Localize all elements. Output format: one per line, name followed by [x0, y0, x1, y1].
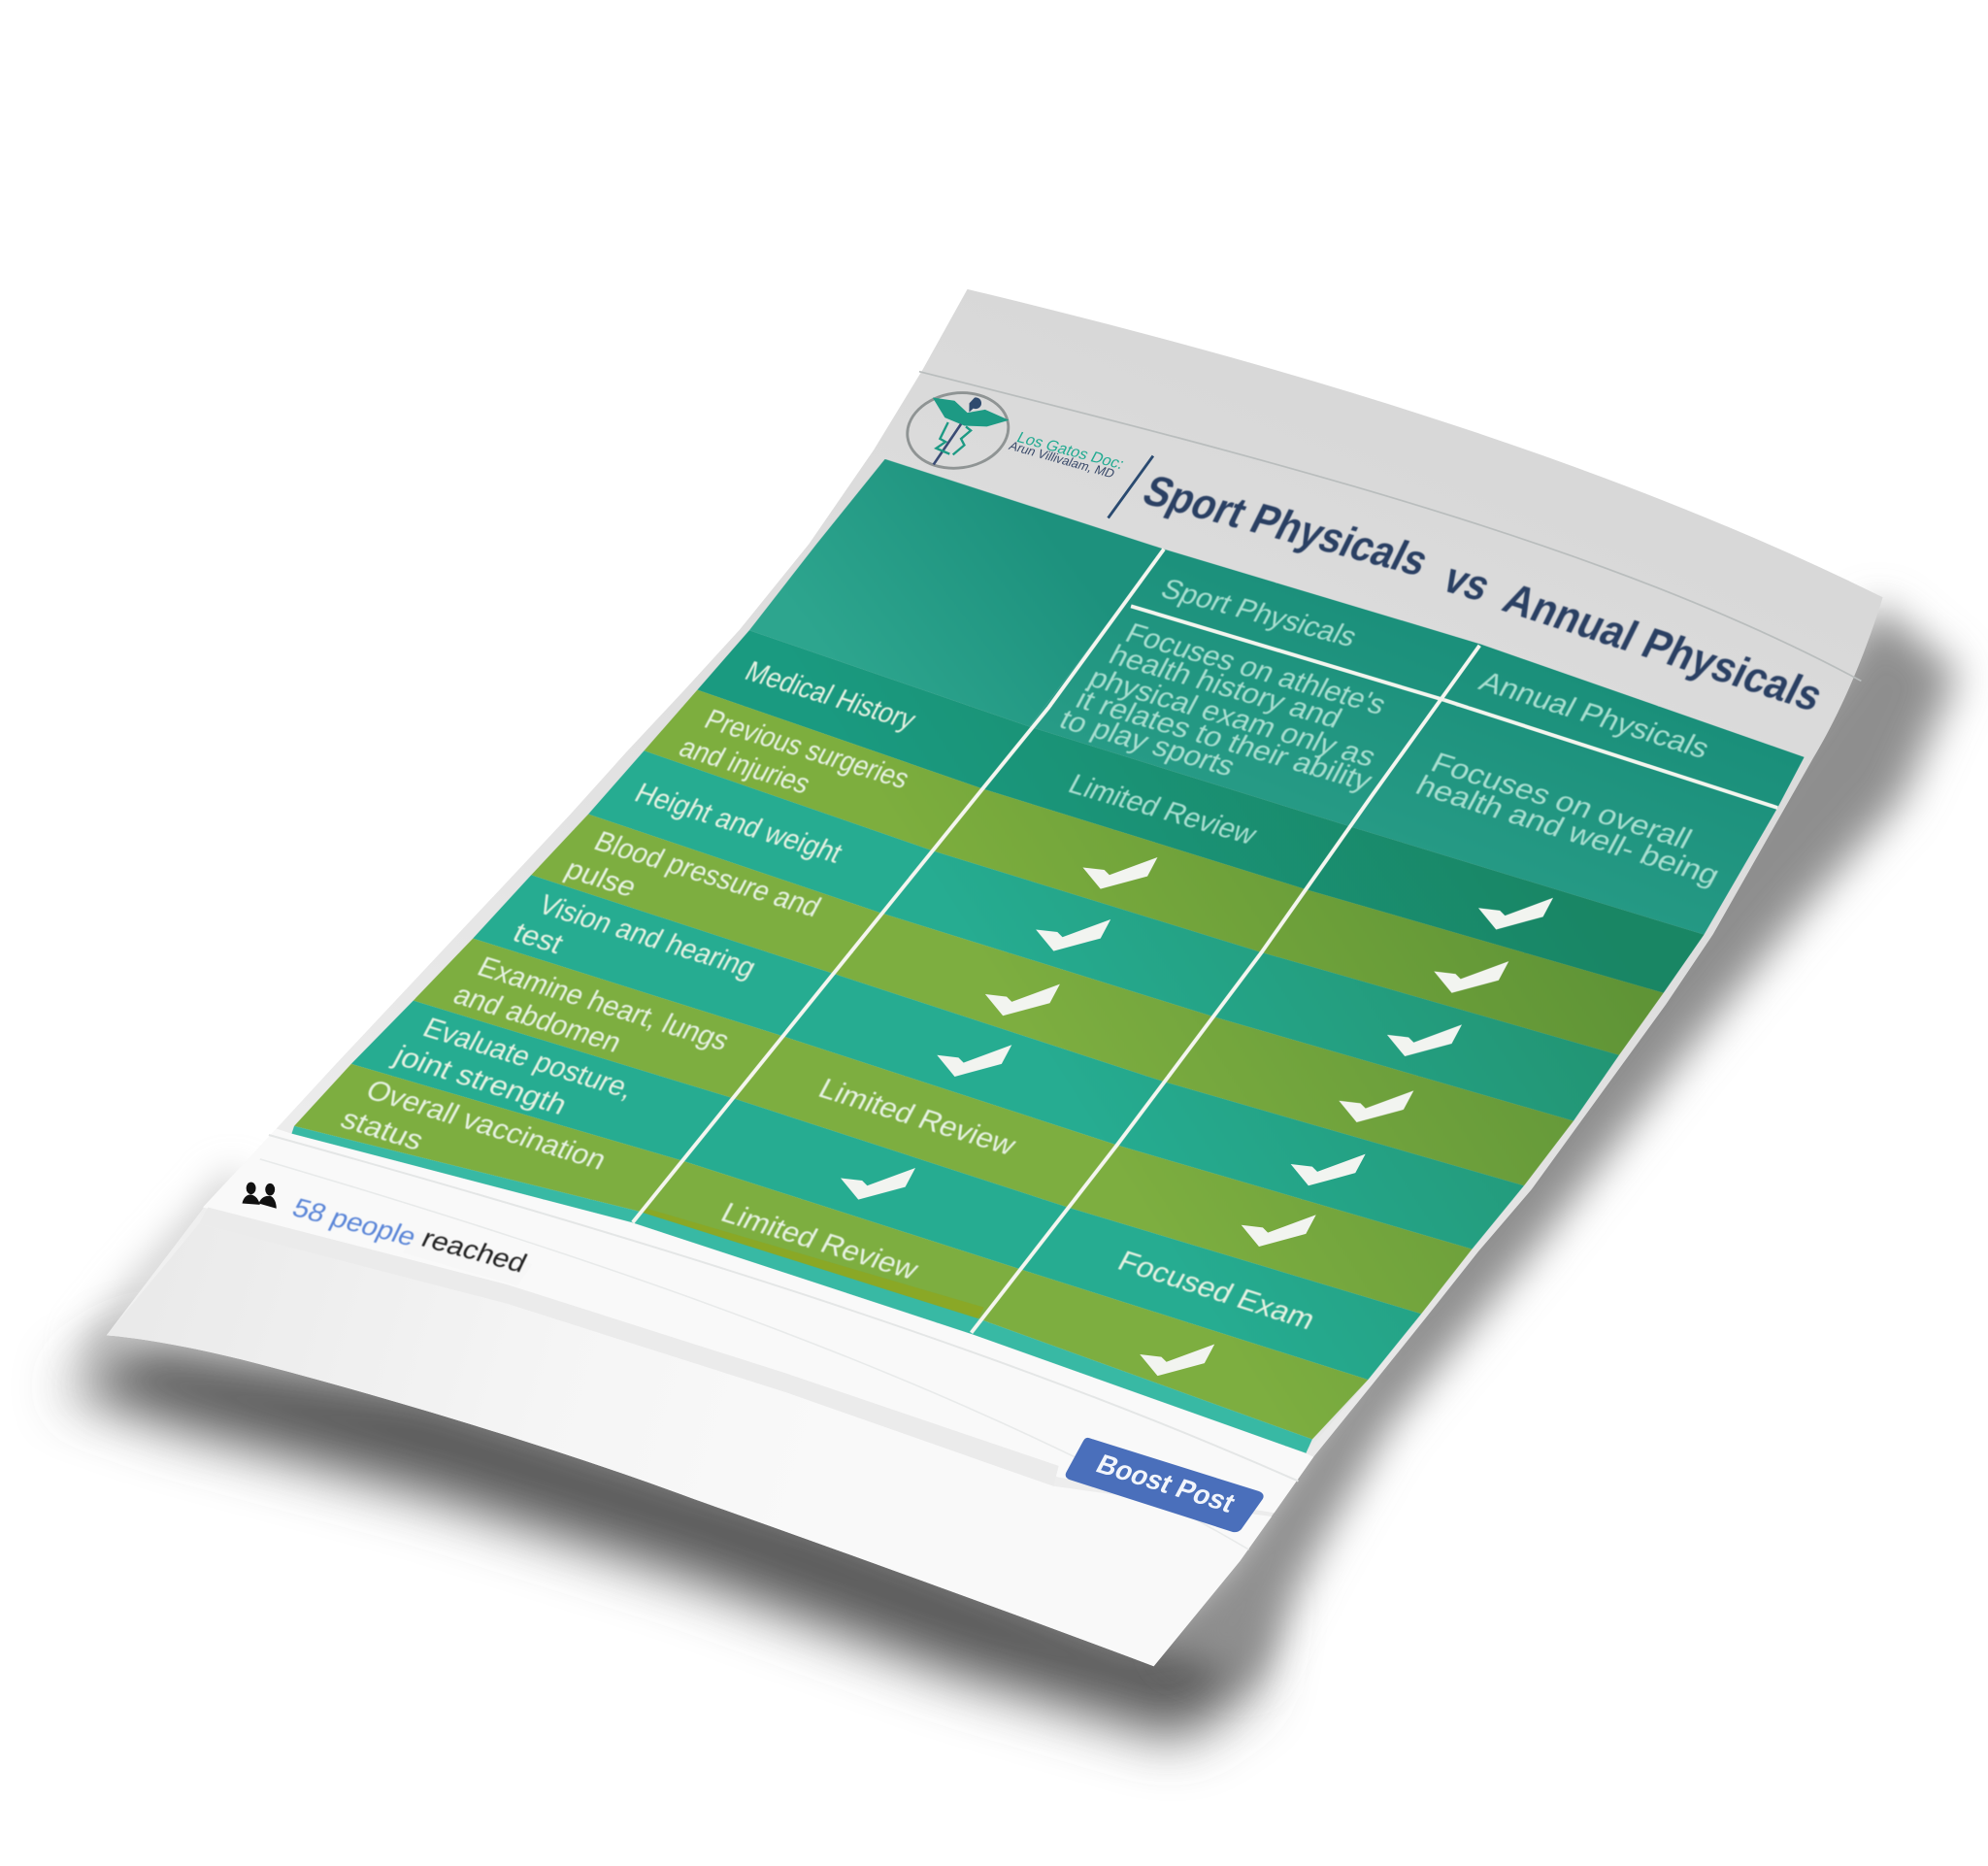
annual physicals column head: Annual Physicals — [1474, 665, 1715, 764]
row: examine — [414, 939, 1472, 1314]
focused exam: Focused Exam — [1112, 1245, 1321, 1336]
sport description: health history and — [1104, 639, 1347, 734]
logo wings — [933, 397, 1009, 426]
sport physicals column head: Sport Physicals — [1156, 573, 1363, 652]
examine heart: and abdomen — [448, 978, 627, 1058]
limited review row 6: Limited Review — [813, 1072, 1022, 1161]
medical history: Medical History — [740, 654, 922, 736]
overall vaccination: status — [336, 1102, 430, 1156]
row: vision and hearing — [473, 875, 1524, 1250]
overall vaccination: Overall vaccination — [361, 1073, 613, 1176]
evaluate posture: joint strength — [387, 1039, 573, 1120]
reach text — [287, 1193, 531, 1279]
height and weight: Height and weight — [630, 777, 848, 869]
title divider — [1109, 456, 1153, 518]
column divider 1 — [633, 550, 1164, 1222]
blood pressure: pulse — [560, 852, 643, 903]
logo name: Los Gatos Doc: — [1013, 429, 1127, 473]
header rule annual — [1444, 700, 1777, 808]
column header block — [1030, 550, 1805, 935]
logo snakes — [936, 422, 971, 454]
table base strip — [291, 1126, 1312, 1453]
logo — [903, 386, 1127, 481]
annual description: Focuses on overall — [1426, 746, 1698, 855]
title vs: vs — [1436, 554, 1499, 611]
title part 1: Sport Physicals — [1136, 467, 1436, 585]
icon: people — [242, 1183, 277, 1209]
limited review row 1: Limited Review — [1063, 768, 1263, 850]
annual description: health and well- being — [1410, 769, 1726, 891]
footer panels and rules — [107, 1128, 1313, 1666]
olive highlight — [638, 1209, 984, 1321]
previous surgeries: Previous surgeries — [699, 703, 915, 794]
logo head — [969, 397, 981, 413]
logo doctor: Arun Villivalam, MD — [1007, 439, 1117, 481]
header labels — [1054, 573, 1726, 891]
reach patch — [403, 1230, 533, 1285]
column divider 2 — [971, 646, 1479, 1333]
row: vaccination — [294, 1064, 1368, 1439]
examine heart: Examine heart, lungs — [473, 950, 735, 1056]
empty top-left header — [749, 459, 1164, 726]
title part 2: Annual Physicals — [1496, 575, 1831, 720]
header rule sport — [1131, 606, 1444, 700]
evaluate posture: Evaluate posture, — [417, 1011, 641, 1105]
previous surgeries — [674, 703, 915, 800]
shading overlay — [1015, 722, 1705, 1408]
sport description: Focuses on athlete's — [1120, 617, 1392, 720]
sport description: to play sports — [1054, 704, 1241, 782]
limited review row 8: Limited Review — [715, 1196, 924, 1285]
row: evaluate posture — [351, 1001, 1421, 1380]
vision and hearing: Vision and hearing — [533, 888, 762, 983]
upper footer panel — [203, 1128, 1313, 1513]
logo staff — [934, 424, 961, 464]
blood pressure: Blood pressure and — [589, 824, 827, 923]
paper sheet — [107, 289, 1883, 1666]
checkmarks sport column — [841, 857, 1157, 1200]
boost post button — [1066, 1438, 1264, 1532]
sport description — [1054, 617, 1392, 797]
58 people: 58 people — [287, 1193, 421, 1252]
button label: Boost Post — [1091, 1449, 1240, 1518]
logo ring — [903, 386, 1013, 475]
button body — [1066, 1438, 1264, 1532]
sport description: physical exam only as — [1083, 662, 1381, 773]
previous surgeries: and injuries — [674, 731, 816, 800]
title — [1136, 467, 1831, 720]
row labels — [336, 654, 1321, 1336]
reached: reached — [416, 1224, 531, 1279]
row: previous surgeries — [645, 690, 1664, 1055]
paper fold line — [919, 372, 1861, 681]
status bar — [199, 1207, 1059, 1486]
row: height and weight — [588, 750, 1619, 1121]
comparison table — [253, 444, 1839, 1471]
row: blood pressure — [531, 815, 1574, 1185]
checkmarks annual column — [1140, 898, 1553, 1376]
vision and hearing: test — [508, 916, 570, 959]
sport description: it relates to their ability — [1071, 683, 1378, 797]
drop shadow under paper — [63, 604, 1959, 1740]
row: medical history — [697, 630, 1704, 993]
blood pressure — [560, 824, 827, 923]
lower footer panel — [107, 1223, 1272, 1666]
